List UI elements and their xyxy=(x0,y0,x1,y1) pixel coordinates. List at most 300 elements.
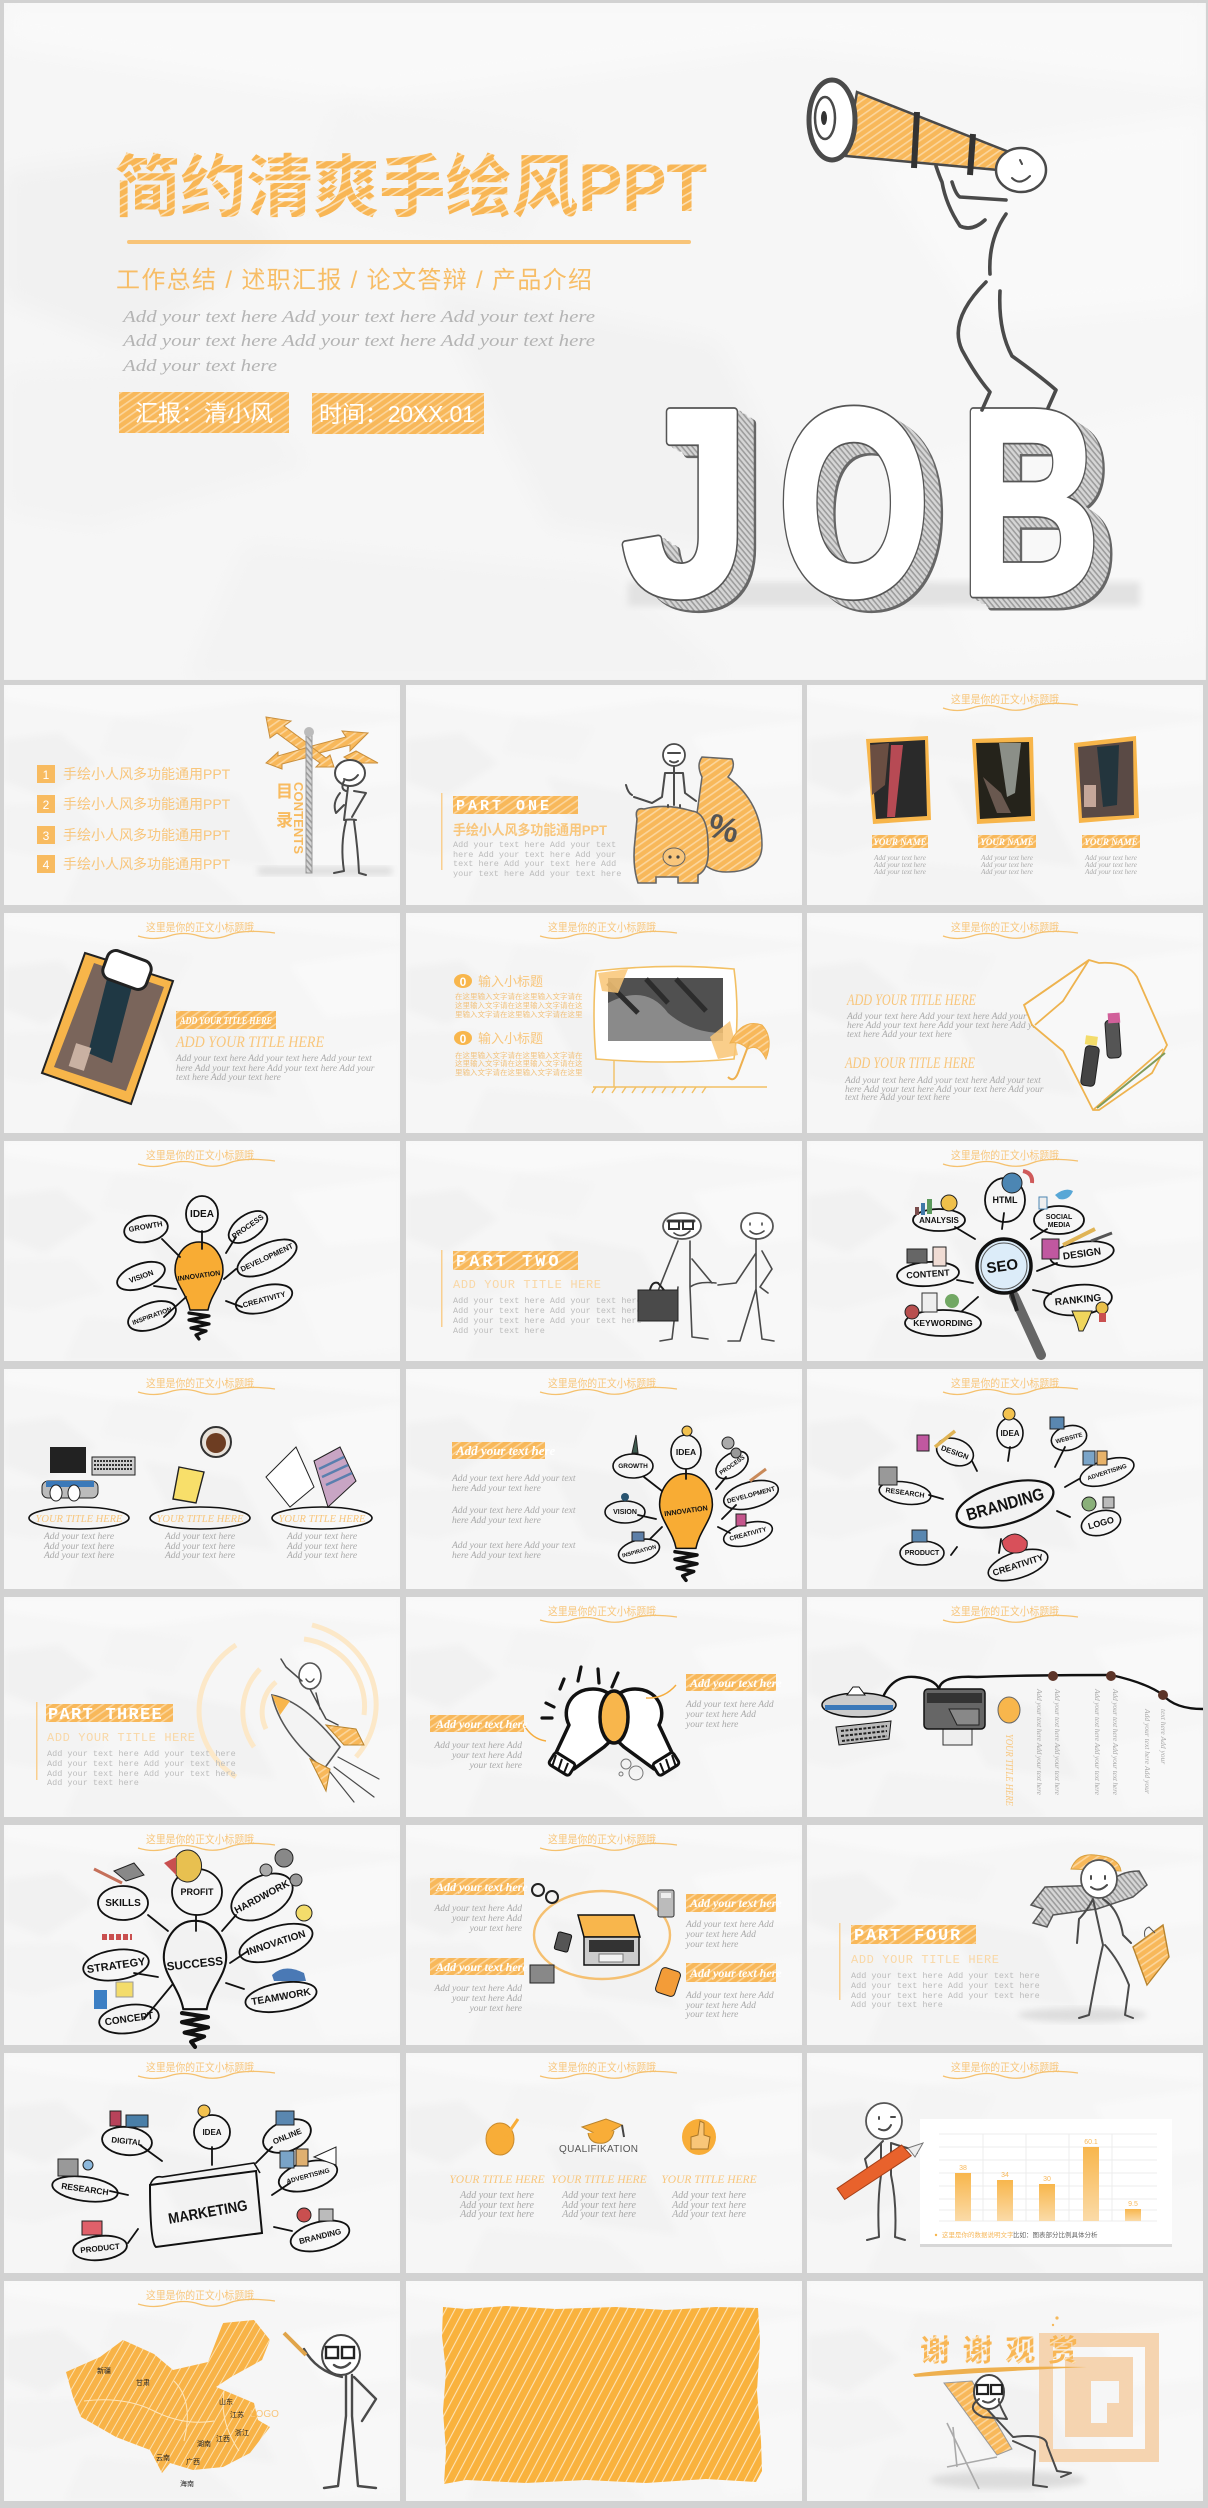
name tags: YOUR NAME xyxy=(980,837,1034,847)
tag top right: Add your text here xyxy=(689,1896,782,1910)
slide heading xyxy=(943,1604,1078,1622)
JOB 3D letters xyxy=(622,355,1118,663)
panel: slide 13 part three xyxy=(4,1597,400,1817)
section text: Add your text here Add your text here xyxy=(453,1296,642,1306)
idea bubbles: CREATIVITY xyxy=(242,1289,287,1310)
slide heading: 这里是你的正文小标题哦 xyxy=(951,2060,1059,2074)
slide heading: 这里是你的正文小标题哦 xyxy=(548,1604,656,1618)
captions: Add your text here xyxy=(164,1542,235,1552)
map labels: 浙江 xyxy=(235,2428,249,2437)
oval titles: YOUR TITLE HERE xyxy=(279,1514,366,1525)
section text: Add your text here xyxy=(851,2000,943,2010)
contents list: 3 xyxy=(43,829,50,843)
marketing bubbles: ONLINE xyxy=(271,2126,303,2146)
success bubbles: PROFIT xyxy=(180,1887,214,1897)
text 1: Add your text here Add your text here Add your text xyxy=(846,1012,1043,1022)
bar chart card: 这里是你的数据说明文字 xyxy=(942,2230,1014,2239)
branding center xyxy=(951,1471,1059,1537)
marketing bubbles: IDEA xyxy=(202,2128,222,2137)
slide heading: 这里是你的正文小标题哦 xyxy=(146,2288,254,2302)
cover title: 简约清爽手绘风PPT xyxy=(114,150,707,226)
oval titles: YOUR TITLE HERE xyxy=(36,1514,123,1525)
icon: thumb up xyxy=(682,2119,716,2155)
vertical text columns xyxy=(1035,1688,1168,1796)
map labels: 新疆 xyxy=(97,2366,111,2375)
panel: slide 10 office items xyxy=(4,1369,400,1589)
SEO bubbles: KEYWORDING xyxy=(913,1318,973,1328)
photo 2 xyxy=(972,737,1035,824)
success bubbles: INNOVATION xyxy=(245,1929,307,1958)
small gears xyxy=(619,1759,643,1780)
contents list: 手绘小人风多功能通用PPT xyxy=(63,796,231,812)
piggy bank xyxy=(634,806,708,883)
JOB 3D letters: J xyxy=(622,355,750,651)
success bubbles: CONCEPT xyxy=(104,2011,154,2028)
bubbles: GROWTH xyxy=(618,1463,648,1470)
marketing bubbles: DIGITAL xyxy=(111,2135,143,2148)
right tag: Add your text here xyxy=(689,1676,782,1690)
coffee icon xyxy=(201,1427,231,1457)
part heading xyxy=(453,796,578,815)
text 2: text here Add your text here xyxy=(845,1093,950,1103)
branding bubbles: DESIGN xyxy=(940,1443,970,1462)
map labels: 山东 xyxy=(219,2397,233,2406)
marketing bubbles: ADVERTISING xyxy=(286,2167,330,2186)
panel: slide 3 photos xyxy=(807,685,1203,905)
thinking figure xyxy=(334,760,366,875)
panel: slide 17 laptop xyxy=(406,1825,802,2045)
bar chart card: 60.1 xyxy=(1084,2139,1098,2146)
panel: slide 1 contents xyxy=(4,685,400,905)
small icons xyxy=(58,2105,336,2235)
connectors xyxy=(134,1915,248,2019)
slide heading xyxy=(138,2060,275,2078)
idea bubbles: INSPIRATION xyxy=(132,1306,173,1327)
vertical text columns: Add your text here Add your text here xyxy=(1053,1688,1062,1796)
text 1: here Add your text here Add your text here Add your xyxy=(847,1021,1046,1031)
slide heading xyxy=(943,692,1078,710)
right text: Add your text here Add xyxy=(685,1700,774,1710)
slide heading xyxy=(540,920,677,938)
column titles: YOUR TITLE HERE xyxy=(449,2174,545,2186)
paper background xyxy=(4,1825,400,2045)
paper background xyxy=(4,2281,400,2501)
branding bubbles: PRODUCT xyxy=(905,1550,940,1557)
section text xyxy=(453,840,621,879)
section text: text here Add your text here Add xyxy=(453,859,616,869)
paper background xyxy=(4,1597,400,1817)
panel: slide 5 board xyxy=(406,913,802,1133)
captions: Add your text here xyxy=(43,1532,114,1542)
date tag: 时间：20XX.01 xyxy=(319,401,475,427)
right figure xyxy=(718,1213,774,1341)
orange scribble block xyxy=(442,2306,762,2484)
money bag: % xyxy=(704,807,743,851)
cover body text: Add your text here Add your text here Add your text here xyxy=(122,307,596,326)
marketing bubbles: BRANDING xyxy=(298,2227,342,2246)
marketing bubbles xyxy=(51,2113,352,2263)
laptop xyxy=(554,1915,640,1965)
magnifier xyxy=(977,1239,1041,1355)
icon: check xyxy=(486,2119,518,2155)
bulb bases xyxy=(548,1752,680,1776)
tag bottom left: Add your text here xyxy=(435,1960,528,1974)
JOB 3D letters: O xyxy=(778,355,930,651)
photo captions xyxy=(873,854,1137,876)
JOB 3D letters: O xyxy=(796,367,948,663)
paper background xyxy=(406,1141,802,1361)
text 2: here Add your text here Add your text here Add your xyxy=(845,1085,1044,1095)
text bottom left: your text here xyxy=(469,2004,522,2014)
text bottom right: Add your text here Add xyxy=(685,1991,774,2001)
right text: your text here xyxy=(685,1720,738,1730)
presenter figure xyxy=(865,2103,917,2240)
title underline xyxy=(127,240,691,244)
slide heading xyxy=(138,1832,275,1850)
name tags: YOUR NAME xyxy=(1084,837,1138,847)
section text xyxy=(47,1749,236,1788)
slide heading: 这里是你的正文小标题哦 xyxy=(146,2060,254,2074)
section title: ADD YOUR TITLE HERE xyxy=(47,1731,195,1745)
paper background xyxy=(807,685,1203,905)
small icons xyxy=(94,1849,312,2009)
lounge shadow xyxy=(930,2471,1086,2489)
column titles: YOUR TITLE HERE xyxy=(551,2174,647,2186)
item 2: 0 xyxy=(460,1032,467,1046)
text groups xyxy=(451,1474,576,1561)
paper background xyxy=(4,913,400,1133)
orange ring xyxy=(534,1891,670,1979)
modem device xyxy=(822,1687,896,1717)
JOB 3D letters: B xyxy=(960,355,1100,651)
section text xyxy=(851,1971,1040,2010)
captions: Add your text here xyxy=(286,1542,357,1552)
rocket rider xyxy=(281,1659,338,1725)
orange token xyxy=(998,1697,1020,1723)
icon: calculator xyxy=(658,1890,674,1917)
section text: Add your text here xyxy=(47,1778,139,1788)
name tags: YOUR NAME xyxy=(873,837,927,847)
JOB 3D letters: B xyxy=(976,365,1116,661)
JOB 3D letters: B xyxy=(978,367,1118,663)
photo captions: Add your text here xyxy=(1084,854,1137,862)
slide heading: 这里是你的正文小标题哦 xyxy=(146,1148,254,1162)
paper background xyxy=(807,1369,1203,1589)
paper background xyxy=(4,1369,400,1589)
text groups: here Add your text here xyxy=(452,1551,541,1561)
arrows xyxy=(524,1685,676,1741)
map labels: 甘肃 xyxy=(136,2378,150,2387)
briefcase xyxy=(638,1283,678,1321)
marketing book xyxy=(150,2163,262,2247)
item 2: 这里输入文字请在这里输入文字请在这 xyxy=(455,1058,583,1068)
success bubbles: STRATEGY xyxy=(86,1956,147,1976)
paper background xyxy=(406,1597,802,1817)
icon: book xyxy=(530,1965,554,1983)
bulb pair xyxy=(554,1689,674,1769)
paper background xyxy=(4,685,400,905)
section text xyxy=(453,1296,642,1336)
panel: slide 2 part one xyxy=(406,685,802,905)
text bottom left xyxy=(433,1984,522,2014)
branding center: BRANDING xyxy=(964,1484,1046,1525)
success bubbles: HARDWORK xyxy=(233,1878,292,1917)
right text: your text here Add xyxy=(685,1710,756,1720)
subtitle: 工作总结 / 述职汇报 / 论文答辩 / 产品介绍 xyxy=(116,267,592,294)
item 1: 这里输入文字请在这里输入文字请在这 xyxy=(455,1000,583,1010)
photo captions: Add your text here xyxy=(873,868,926,876)
accent line xyxy=(839,1923,840,2000)
vertical text columns: text here Add your xyxy=(1159,1709,1168,1764)
success bubbles xyxy=(81,1864,319,2037)
SEO bubbles: DESIGN xyxy=(1062,1246,1102,1263)
body text: text here Add your text here xyxy=(176,1073,281,1083)
body text: here Add your text here Add your text here Add your xyxy=(176,1064,375,1074)
whiteboard legs and ground xyxy=(592,1061,767,1093)
bar chart card: 比如：图表部分比例具体分析 xyxy=(1013,2230,1098,2239)
right text xyxy=(685,1700,774,1730)
body text xyxy=(175,1054,375,1083)
slide heading xyxy=(138,2288,275,2306)
text bottom left: Add your text here Add xyxy=(433,1984,522,1994)
idea bubbles: PROCESS xyxy=(230,1212,265,1241)
JOB 3D letters: B xyxy=(965,358,1105,654)
panel: slide 19 marketing xyxy=(4,2053,400,2273)
item 2: 输入小标题 xyxy=(478,1031,543,1046)
panel: slide 8 part two xyxy=(406,1141,802,1361)
paper background xyxy=(807,1597,1203,1817)
column text: Add your text here xyxy=(561,2190,636,2201)
small icons xyxy=(621,1426,766,1541)
highlighted title xyxy=(176,1011,276,1029)
bar chart card: 30 xyxy=(1043,2176,1051,2183)
captions xyxy=(43,1532,357,1561)
item 1: 0 xyxy=(460,975,467,989)
vertical text columns: Add your text here Add your text here xyxy=(1035,1688,1044,1796)
money bag xyxy=(694,757,762,872)
tag top left: Add your text here xyxy=(435,1880,528,1894)
text bottom right: your text here xyxy=(685,2010,738,2020)
marketing bubbles: RESEARCH xyxy=(61,2181,109,2197)
tool box xyxy=(1133,1925,1169,1985)
panel: slide 22 map xyxy=(4,2281,400,2501)
contents list: 4 xyxy=(43,858,50,872)
section accent line xyxy=(441,793,442,870)
paper background xyxy=(807,1141,1203,1361)
panel: slide 24 thanks xyxy=(807,2281,1203,2501)
SEO bubbles: MEDIA xyxy=(1048,1222,1070,1229)
paper sheets icon xyxy=(266,1447,356,1507)
panel: slide 4 portrait xyxy=(4,913,400,1133)
JOB 3D letters: J xyxy=(627,358,755,654)
pointing figure with glasses xyxy=(284,2333,376,2488)
column text: Add your text here xyxy=(561,2200,636,2211)
paper background xyxy=(406,1825,802,2045)
contents heading: CONTENTS xyxy=(291,782,306,854)
panel: slide 23 hatch block xyxy=(406,2281,802,2501)
slide heading xyxy=(943,1376,1078,1394)
panel: slide 18 part four xyxy=(807,1825,1203,2045)
paper background xyxy=(4,2053,400,2273)
slide heading xyxy=(943,1148,1078,1166)
accent line xyxy=(441,1250,442,1327)
JOB 3D letters: O xyxy=(778,355,930,651)
photo captions: Add your text here xyxy=(980,868,1033,876)
marker pens xyxy=(1080,1013,1121,1087)
wrench xyxy=(1031,1871,1147,1927)
slide heading: 这里是你的正文小标题哦 xyxy=(548,1832,656,1846)
bubbles: IDEA xyxy=(676,1447,696,1457)
connectors xyxy=(154,1231,242,1317)
paper background xyxy=(406,2281,802,2501)
text top left: Add your text here Add xyxy=(433,1904,522,1914)
paper background xyxy=(406,1369,802,1589)
slide heading: 这里是你的正文小标题哦 xyxy=(548,2060,656,2074)
tilted photo frame xyxy=(42,948,173,1104)
photo captions: Add your text here xyxy=(873,854,926,862)
slide heading: 这里是你的正文小标题哦 xyxy=(951,1376,1059,1390)
slide heading xyxy=(540,1604,677,1622)
captions: Add your text here xyxy=(43,1551,114,1561)
light rays xyxy=(542,1667,618,1718)
label ovals xyxy=(29,1507,372,1529)
idea bubbles: VISION xyxy=(128,1268,155,1285)
cover body text: Add your text here xyxy=(122,356,278,375)
qualification label: QUALIFIKATION xyxy=(559,2144,639,2155)
branding bubbles xyxy=(878,1418,1137,1587)
panel: slide 20 qualification xyxy=(406,2053,802,2273)
slide heading: 这里是你的正文小标题哦 xyxy=(146,1376,254,1390)
connectors xyxy=(929,1447,1079,1555)
panel: cover slide xyxy=(4,3,1206,680)
title 1: ADD YOUR TITLE HERE xyxy=(846,992,976,1009)
SEO bubbles: ANALYSIS xyxy=(919,1216,960,1225)
China map xyxy=(66,2320,270,2473)
paper background xyxy=(807,2053,1203,2273)
section text: Add your text here Add your text here xyxy=(453,1306,642,1316)
innovation bulb xyxy=(175,1242,223,1339)
item 2: 里输入文字请在这里输入文字请在这里 xyxy=(455,1067,583,1077)
text 2 xyxy=(844,1076,1044,1103)
stamp watermark xyxy=(1039,2333,1159,2462)
signpost pole xyxy=(304,727,314,873)
signpost shadow xyxy=(258,867,392,875)
slide heading: 这里是你的正文小标题哦 xyxy=(951,1148,1059,1162)
contents list: 手绘小人风多功能通用PPT xyxy=(63,766,231,782)
vertical text columns: Add your text here Add your text here xyxy=(1093,1688,1102,1796)
slide heading: 这里是你的正文小标题哦 xyxy=(951,920,1059,934)
branding bubbles: CREATIVITY xyxy=(991,1552,1045,1578)
section title: ADD YOUR TITLE HERE xyxy=(851,1953,999,1967)
bar chart card: 34 xyxy=(1001,2172,1009,2179)
marketing bubbles: PRODUCT xyxy=(80,2242,120,2255)
small icons xyxy=(879,1408,1114,1553)
captions: Add your text here xyxy=(43,1542,114,1552)
slide heading xyxy=(138,1376,275,1394)
item 2: 在这里输入文字请在这里输入文字请在 xyxy=(455,1050,583,1060)
panel: slide 15 timeline devices xyxy=(807,1597,1203,1817)
left text: Add your text here Add xyxy=(433,1741,522,1751)
slide heading: 这里是你的正文小标题哦 xyxy=(146,1832,254,1846)
panel: slide 16 success xyxy=(4,1825,400,2047)
map labels: 云南 xyxy=(156,2453,170,2462)
item 1 xyxy=(454,974,583,1019)
item 1: 里输入文字请在这里输入文字请在这里 xyxy=(455,1009,583,1019)
cover body text: Add your text here Add your text here Add your text here xyxy=(122,331,596,350)
text top right xyxy=(685,1920,774,1950)
section text: Add your text here Add your text here xyxy=(851,1991,1040,2001)
slide heading xyxy=(138,920,275,938)
contents list: 2 xyxy=(43,798,50,812)
paper background xyxy=(807,1825,1203,2045)
part heading: PART TWO xyxy=(456,1253,562,1272)
marketing book: MARKETING xyxy=(167,2197,249,2228)
idea bubbles xyxy=(113,1196,302,1337)
photo captions: Add your text here xyxy=(980,861,1033,869)
map labels xyxy=(97,2366,249,2488)
branding bubbles: WEBSITE xyxy=(1055,1433,1083,1445)
slide heading xyxy=(540,2060,677,2078)
name tags xyxy=(872,835,1140,848)
SEO bubbles: HTML xyxy=(992,1195,1018,1205)
bulb xyxy=(660,1474,712,1580)
telescope figure xyxy=(809,80,1056,410)
photo captions: Add your text here xyxy=(1084,868,1137,876)
text top left xyxy=(433,1904,522,1934)
section text: your text here Add your text here xyxy=(453,869,621,879)
success bubbles: TEAMWORK xyxy=(251,1987,312,2008)
SEO bubbles: SOCIAL xyxy=(1046,1214,1073,1221)
panel: slide 14 two bulbs xyxy=(406,1597,802,1817)
brush stroke xyxy=(913,2367,1087,2377)
column text: Add your text here xyxy=(459,2200,534,2211)
section text: Add your text here xyxy=(453,1326,545,1336)
panel: slide 21 chart xyxy=(807,2053,1203,2273)
map logo label: LOGO xyxy=(250,2409,279,2420)
JOB 3D letters: O xyxy=(794,365,946,661)
branding bubbles: IDEA xyxy=(1000,1429,1020,1438)
deck chair xyxy=(944,2381,1012,2489)
section text: Add your text here Add your text here xyxy=(453,1316,642,1326)
text groups: Add your text here Add your text xyxy=(451,1506,576,1516)
contents list xyxy=(37,765,231,873)
paper background xyxy=(807,2281,1203,2501)
bubbles: DEVELOPMENT xyxy=(726,1486,776,1505)
riding figure xyxy=(626,744,696,807)
title 2: ADD YOUR TITLE HERE xyxy=(844,1055,975,1072)
column titles xyxy=(449,2174,757,2186)
vertical title: YOUR TITLE HERE xyxy=(1003,1734,1014,1806)
innovation bulb: INNOVATION xyxy=(177,1270,221,1283)
map labels: 广西 xyxy=(186,2457,200,2466)
contents heading: 目 xyxy=(276,782,293,801)
connectors xyxy=(955,1213,1057,1311)
icon: glasses xyxy=(532,1884,558,1903)
panel: slide 11 innovation with text xyxy=(406,1369,802,1589)
captions: Add your text here xyxy=(286,1551,357,1561)
JOB ground shadow xyxy=(628,582,1140,606)
cable with pins xyxy=(883,1671,1203,1709)
JOB 3D letters: O xyxy=(783,358,935,654)
SEO bubbles xyxy=(896,1178,1115,1336)
column text: Add your text here xyxy=(459,2190,534,2201)
text top left: your text here xyxy=(469,1924,522,1934)
text 1 xyxy=(846,1012,1046,1040)
success bubbles: SKILLS xyxy=(105,1898,141,1909)
printer xyxy=(924,1689,985,1745)
JOB 3D letters: J xyxy=(640,367,768,663)
panel: slide 9 SEO xyxy=(807,1141,1203,1361)
